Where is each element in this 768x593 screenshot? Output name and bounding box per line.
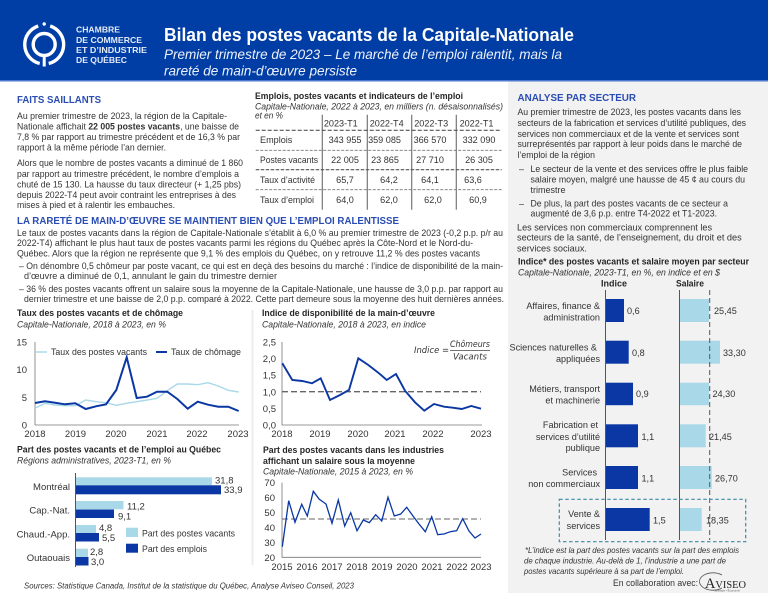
callout: vente et services highlight [559,499,746,542]
category labels: Chaud.-App. [17,530,70,540]
bullet: chômeur par poste vacant: d’œuvre a diminué de 0,1, annulant le gain du trimestre dernier [24,271,277,281]
table row: postes vacants [260,155,493,165]
chart title: Salaire [676,278,704,288]
text block: faits saillants 1: Au premier trimestre de 2023, la région de la Capitale- [17,111,227,121]
table row: taux d'activité [260,175,482,185]
panel: analyse par secteur [508,82,768,593]
text block: analyse: surreprésentés par rapport à leur poids dans le marché de [518,139,742,149]
index values [627,306,666,526]
sector labels: Services [562,467,597,477]
sector labels: publique [566,443,600,453]
chart: salaire sous la moyenne: 2020 [396,562,418,573]
formula: Vacants [453,352,488,362]
text block: services non commerciaux: Les services non commerciaux comprennent les [517,223,712,233]
subtitle [164,46,562,78]
value labels: 33,9 [224,485,242,496]
bullet: vente et services: trimestre [530,185,566,195]
value labels: 9,1 [118,512,131,522]
salary values: 25,45 [714,306,737,316]
chart: salaire sous la moyenne: 70 [264,478,275,489]
sources: Sources: Statistique Canada, Institut de la statistique du Québec, Analyse Aviseo Conseil, 2023 [24,580,354,590]
sector labels: Sciences naturelles & [510,342,597,352]
table header row: 2023-T1 [324,118,358,128]
text block: faits saillants 2: par rapport au trimestre précédent, le nombre d’emplois a [17,169,240,179]
table row: emplois [260,135,495,145]
logo wordmark: CHAMBRE [76,24,120,34]
table row: taux d'emploi: 62,0 [380,195,398,205]
index values: 1,1 [642,432,654,442]
text block: rareté: Québec. Alors que la région ne représente que 9,1 % des emplois du Québec, on y retrouve 11,2 % des postes vacants [17,248,480,258]
bullet: chômeur par poste vacant [19,261,503,281]
formula: Chômeurs [450,339,491,350]
text block: analyse: secteurs de la fabrication et services d’utilité publiques, des [518,118,746,128]
sector labels: Métiers, transport [529,384,600,394]
chart title: Indice* des postes vacants et salaire moyen par secteur [518,257,749,267]
sector labels: non commerciaux [528,479,600,489]
index values: 0,6 [627,306,640,316]
chart title [518,257,749,288]
value labels [90,476,242,568]
salary values: 21,45 [709,432,732,442]
table title [255,91,503,121]
table header row: 2022-T1 [460,118,493,128]
logo wordmark: DE COMMERCE [76,35,142,45]
chart title: Capitale-Nationale, 2018 à 2023, en indice [262,320,426,330]
table row: taux d'activité: 65,7 [336,175,354,185]
salary values: 18,35 [706,516,729,526]
chart: indice de disponibilité: 1,5 [263,370,276,382]
chart: salaire sous la moyenne: 2019 [371,562,393,573]
table row: postes vacants: 23 865 [371,155,399,165]
chart: indice de disponibilité: 2,5 [263,338,276,348]
category labels [17,482,70,564]
bullet: salaire sous la moyenne: – 36 % des postes vacants offrent un salaire sous la moyenne de la Capitale-Nationale, une hausse de 3,0 p.p. par rapport au [19,284,503,294]
formula: Indice = [414,346,449,356]
category labels: Cap.-Nat. [29,506,70,516]
text block: faits saillants 2: depuis 2022-T4 peut avoir contraint les entreprises à des [17,190,236,200]
bullet: chômeur par poste vacant: – On dénombre 0,5 chômeur par poste vacant, ce qui est en deçà des besoins du marché : l’indice de disponibilité de la main- [19,261,503,271]
chart title: Indice [601,278,627,288]
line: taux des postes vacants [35,383,239,408]
chart: salaire sous la moyenne: 50 [264,508,275,519]
chart: indice de disponibilité: 2023 [470,429,492,440]
salary values: 33,30 [723,348,746,358]
text block: rareté [17,228,503,258]
legend: Taux des postes vacants [51,347,147,357]
sector labels: Fabrication et [543,420,598,430]
logo wordmark: ET D’INDUSTRIE [76,45,147,55]
text block: services non commerciaux [517,223,742,254]
chart: indice de disponibilité: 2019 [309,429,331,440]
chart: indice de disponibilité: 2018 [271,429,293,440]
table row: taux d'emploi [260,195,487,205]
table header row: 2022-T4 [370,118,404,128]
bullet: vente et services: – [519,164,525,174]
chart title: Capitale-Nationale, 2015 à 2023, en % [263,466,413,476]
chart: taux des postes vacants et de chômage: 2021 [146,429,168,440]
salary values [706,306,746,526]
chart title: Indice de disponibilité de la main-d’œuvre [262,308,435,318]
bullet: vente et services [519,164,748,195]
chart: salaire sous la moyenne: 20 [264,553,275,564]
chart: salaire sous la moyenne: 2022 [446,562,468,573]
chart: salaire sous la moyenne: 2016 [296,562,318,573]
chart title: affichant un salaire sous la moyenne [263,456,415,466]
text block: services non commerciaux: secteurs de la santé, de l’enseignement, du droit et des [517,233,742,243]
icon: Aviseo logo: Stratégie • Économie [714,588,740,592]
table row: emplois: Emplois [260,135,293,145]
footnote: postes vacants supérieure à sa part de l’emploi. [523,566,684,576]
formula [414,339,491,362]
text block: faits saillants 1 [17,111,240,152]
heading: rareté de main-d'oeuvre: LA RARETÉ DE MAIN-D’ŒUVRE SE MAINTIENT BIEN QUE L’EMPLOI RALENTISSE [17,214,399,227]
legend: Part des emplois [142,544,207,555]
chart: taux des postes vacants et de chômage: 2022 [186,429,208,440]
table row: emplois: 359 085 [368,135,401,145]
text block: faits saillants 2 [17,158,243,210]
text block: analyse: l’emploi de la région [518,150,595,160]
logo wordmark [76,24,147,65]
text block: faits saillants 2: mises à pied et à ralentir les embauches. [17,200,175,210]
table row: taux d'activité: 64,2 [380,175,398,185]
chart: taux des postes vacants et de chômage: 0 [22,420,27,432]
chart: salaire sous la moyenne: 40 [264,523,275,534]
text block: rareté: 2022-T4) affichant le plus haut taux de postes vacants parmi les régions du Québec après la Côte-Nord et le Nord-du- [17,238,473,248]
text block: analyse [518,107,746,160]
index values: 1,5 [653,516,666,526]
value labels: 5,5 [102,533,115,544]
heading: analyse par secteur: ANALYSE PAR SECTEUR [518,92,636,104]
chart: indice de disponibilité: 2022 [422,429,444,440]
chart: taux des postes vacants et de chômage: 2019 [65,429,86,440]
index values: 1,1 [642,474,654,484]
chart: indice de disponibilité: 0,0 [263,420,276,432]
chart: indice de disponibilité: 2,0 [263,354,276,365]
bullet: vente et services: salaire moyen, malgré une hausse de 45 ¢ au cours du [530,174,745,184]
value labels: 11,2 [127,502,145,512]
chart: indice de disponibilité: 2020 [347,429,369,440]
footnote: *L’indice est la part des postes vacants sur la part des emplois [525,545,740,555]
bullet: vente et services: Le secteur de la vente et des services offre le plus faible [530,164,748,174]
panel: faits saillants [17,94,243,210]
value labels: 4,8 [99,523,112,534]
chart: indice et salaire par secteur [510,257,749,542]
table row: taux d'activité: 64,1 [421,175,439,185]
subtitle: Premier trimestre de 2023 – Le marché de l’emploi ralentit, mais la [164,46,562,62]
chart title [263,445,444,476]
chart: taux des postes vacants et de chômage: 2023 [227,429,249,440]
chart: taux des postes vacants et de chômage: 10 [16,365,27,376]
table title: Emplois, postes vacants et indicateurs de l’emploi [255,91,463,101]
table row: taux d'activité: 63,6 [464,175,482,185]
text block: analyse: Au premier trimestre de 2023, les postes vacants dans les [518,107,741,117]
salary values: 24,30 [712,389,735,399]
salary values: 26,70 [715,474,738,484]
chart title: Taux des postes vacants et de chômage [17,308,183,318]
subtitle: rareté de main-d’œuvre persiste [164,62,357,78]
sector labels: administration [543,312,600,322]
chart: salaire sous la moyenne: 30 [264,538,275,549]
heading: faits saillants: FAITS SAILLANTS [17,94,101,106]
bullet: part des postes [519,199,729,219]
sector labels: appliquées [556,354,600,364]
chart: taux des postes vacants et de chômage: 2020 [105,429,127,440]
table row: taux d'emploi: Taux d’emploi [260,195,314,205]
salary bars [680,299,720,531]
footnote [523,545,740,576]
table header row [324,118,493,128]
table title: Capitale-Nationale, 2022 à 2023, en milliers (n. désaisonnalisés) [255,102,503,112]
chart: salaire sous la moyenne: 2018 [346,562,368,573]
legend [126,528,235,555]
table row: taux d'emploi: 60,9 [469,195,487,205]
chart: taux des postes vacants et de chômage: 2018 [24,429,46,440]
sector labels [510,301,600,531]
collaboration credit: En collaboration avec: [613,578,698,588]
chart: part des postes vacants et de l'emploi [17,444,242,568]
bullet: part des postes: De plus, la part des postes vacants de ce secteur a [530,199,729,209]
sector labels: Affaires, finance & [526,301,600,311]
sector labels: services d’utilité [536,432,600,442]
bullet: salaire sous la moyenne [19,284,504,304]
text block: faits saillants 2: Alors que le nombre de postes vacants a diminué de 1 860 [17,158,243,168]
value labels: 2,8 [90,547,103,558]
line: taux de chômage [35,357,239,411]
title: Bilan des postes vacants de la Capitale-Nationale [164,24,574,45]
table row: postes vacants: Postes vacants [260,155,318,165]
chart: salaire sous la moyenne [263,445,492,573]
chart: indice de disponibilité: 2021 [384,429,406,440]
chart: taux des postes vacants et de chômage: 15 [16,338,27,348]
table row: postes vacants: 26 305 [465,155,493,165]
sector labels: Vente & [568,509,600,519]
legend [35,347,241,357]
value labels: 31,8 [215,476,234,486]
text block: faits saillants 1: Nationale affichait 22 005 postes vacants, une baisse de [17,122,239,132]
bullet: salaire sous la moyenne: dernier trimestre et une baisse de 2,0 p.p. comparé à 2022. Cette part demeure sous la moyenne des huit dernières années. [24,294,504,304]
bullet: part des postes: augmenté de 3,6 p.p. entre T4-2022 et T1-2023. [530,209,717,219]
text block: faits saillants 2: chuté de 15 130. La hausse du taux directeur (+ 1,25 pbs) [17,180,241,190]
chart title: Capitale-Nationale, 2018 à 2023, en % [17,320,166,330]
icon: Aviseo logo: AVISEO [705,576,746,592]
chart title [17,308,183,330]
chart: taux des postes vacants et de chômage [16,308,249,440]
bars [76,477,221,566]
category labels: Outaouais [27,553,70,564]
table row: taux d'activité: Taux d’activité [260,175,315,185]
index bars [606,299,650,531]
chart: indice de disponibilité: 0,5 [263,404,276,415]
chart title: Part des postes vacants et de l’emploi au Québec [17,444,221,454]
chart: salaire sous la moyenne: 2021 [421,562,443,573]
chart: salaire sous la moyenne: 2015 [271,562,293,573]
bullet: part des postes: – [519,199,525,209]
legend: Taux de chômage [171,347,241,357]
chart title: Part des postes vacants dans les industries [263,445,444,455]
line: indice [282,358,481,411]
legend: Part des postes vacants [142,528,235,540]
chart: indice de disponibilité [262,308,492,440]
text block: faits saillants 1: rapport à la même période l’an dernier. [17,142,166,152]
chart title: Capitale-Nationale, 2023-T1, en %, en indice et en $ [518,268,721,278]
value labels: 3,0 [91,557,104,568]
table row: emplois: 366 570 [414,135,446,145]
table header row: 2022-T3 [414,118,448,128]
sector labels: services [567,521,600,531]
table row: postes vacants: 22 005 [331,155,359,165]
footnote: de chaque industrie. Au-delà de 1, l’industrie a une part de [524,556,726,566]
text block: rareté: Le taux de postes vacants dans la région de Capitale-Nationale s’établit à 6,0 % au premier trimestre de 2023 (-0,2 p.p. p/r au [17,228,503,238]
text block: analyse: services non commerciaux et de la vente et services sont [518,129,739,139]
chart: salaire sous la moyenne: 2017 [321,562,343,573]
chart title: Régions administratives, 2023-T1, en % [17,456,171,466]
table row: taux d'emploi: 64,0 [336,195,354,205]
sector labels: et machinerie [545,396,600,406]
logo wordmark: DE QUÉBEC [76,54,127,65]
table row: emplois: 343 955 [329,135,361,145]
line: part des postes vacants [282,491,481,547]
header band [0,0,768,82]
text block: services non commerciaux: services sociaux. [517,244,587,254]
icon: chamber logo [25,22,64,66]
text block: faits saillants 1: 7,8 % par rapport au trimestre précédent et de 16,3 % par [17,132,240,142]
chart title [262,308,435,330]
index values: 0,8 [632,348,645,358]
category labels: Montréal [33,482,70,493]
index values: 0,9 [636,389,649,399]
table row: postes vacants: 27 710 [416,155,444,165]
table title: et en % [255,111,283,121]
chart: taux des postes vacants et de chômage: 5 [22,393,27,404]
panel: employment table [255,91,503,210]
chart title [17,444,221,466]
chart: salaire sous la moyenne: 2023 [470,562,492,573]
table row: emplois: 332 090 [463,135,495,145]
chart: salaire sous la moyenne: 60 [264,493,275,504]
table row: taux d'emploi: 62,0 [424,195,442,205]
chart: indice de disponibilité: 1,0 [263,388,276,398]
